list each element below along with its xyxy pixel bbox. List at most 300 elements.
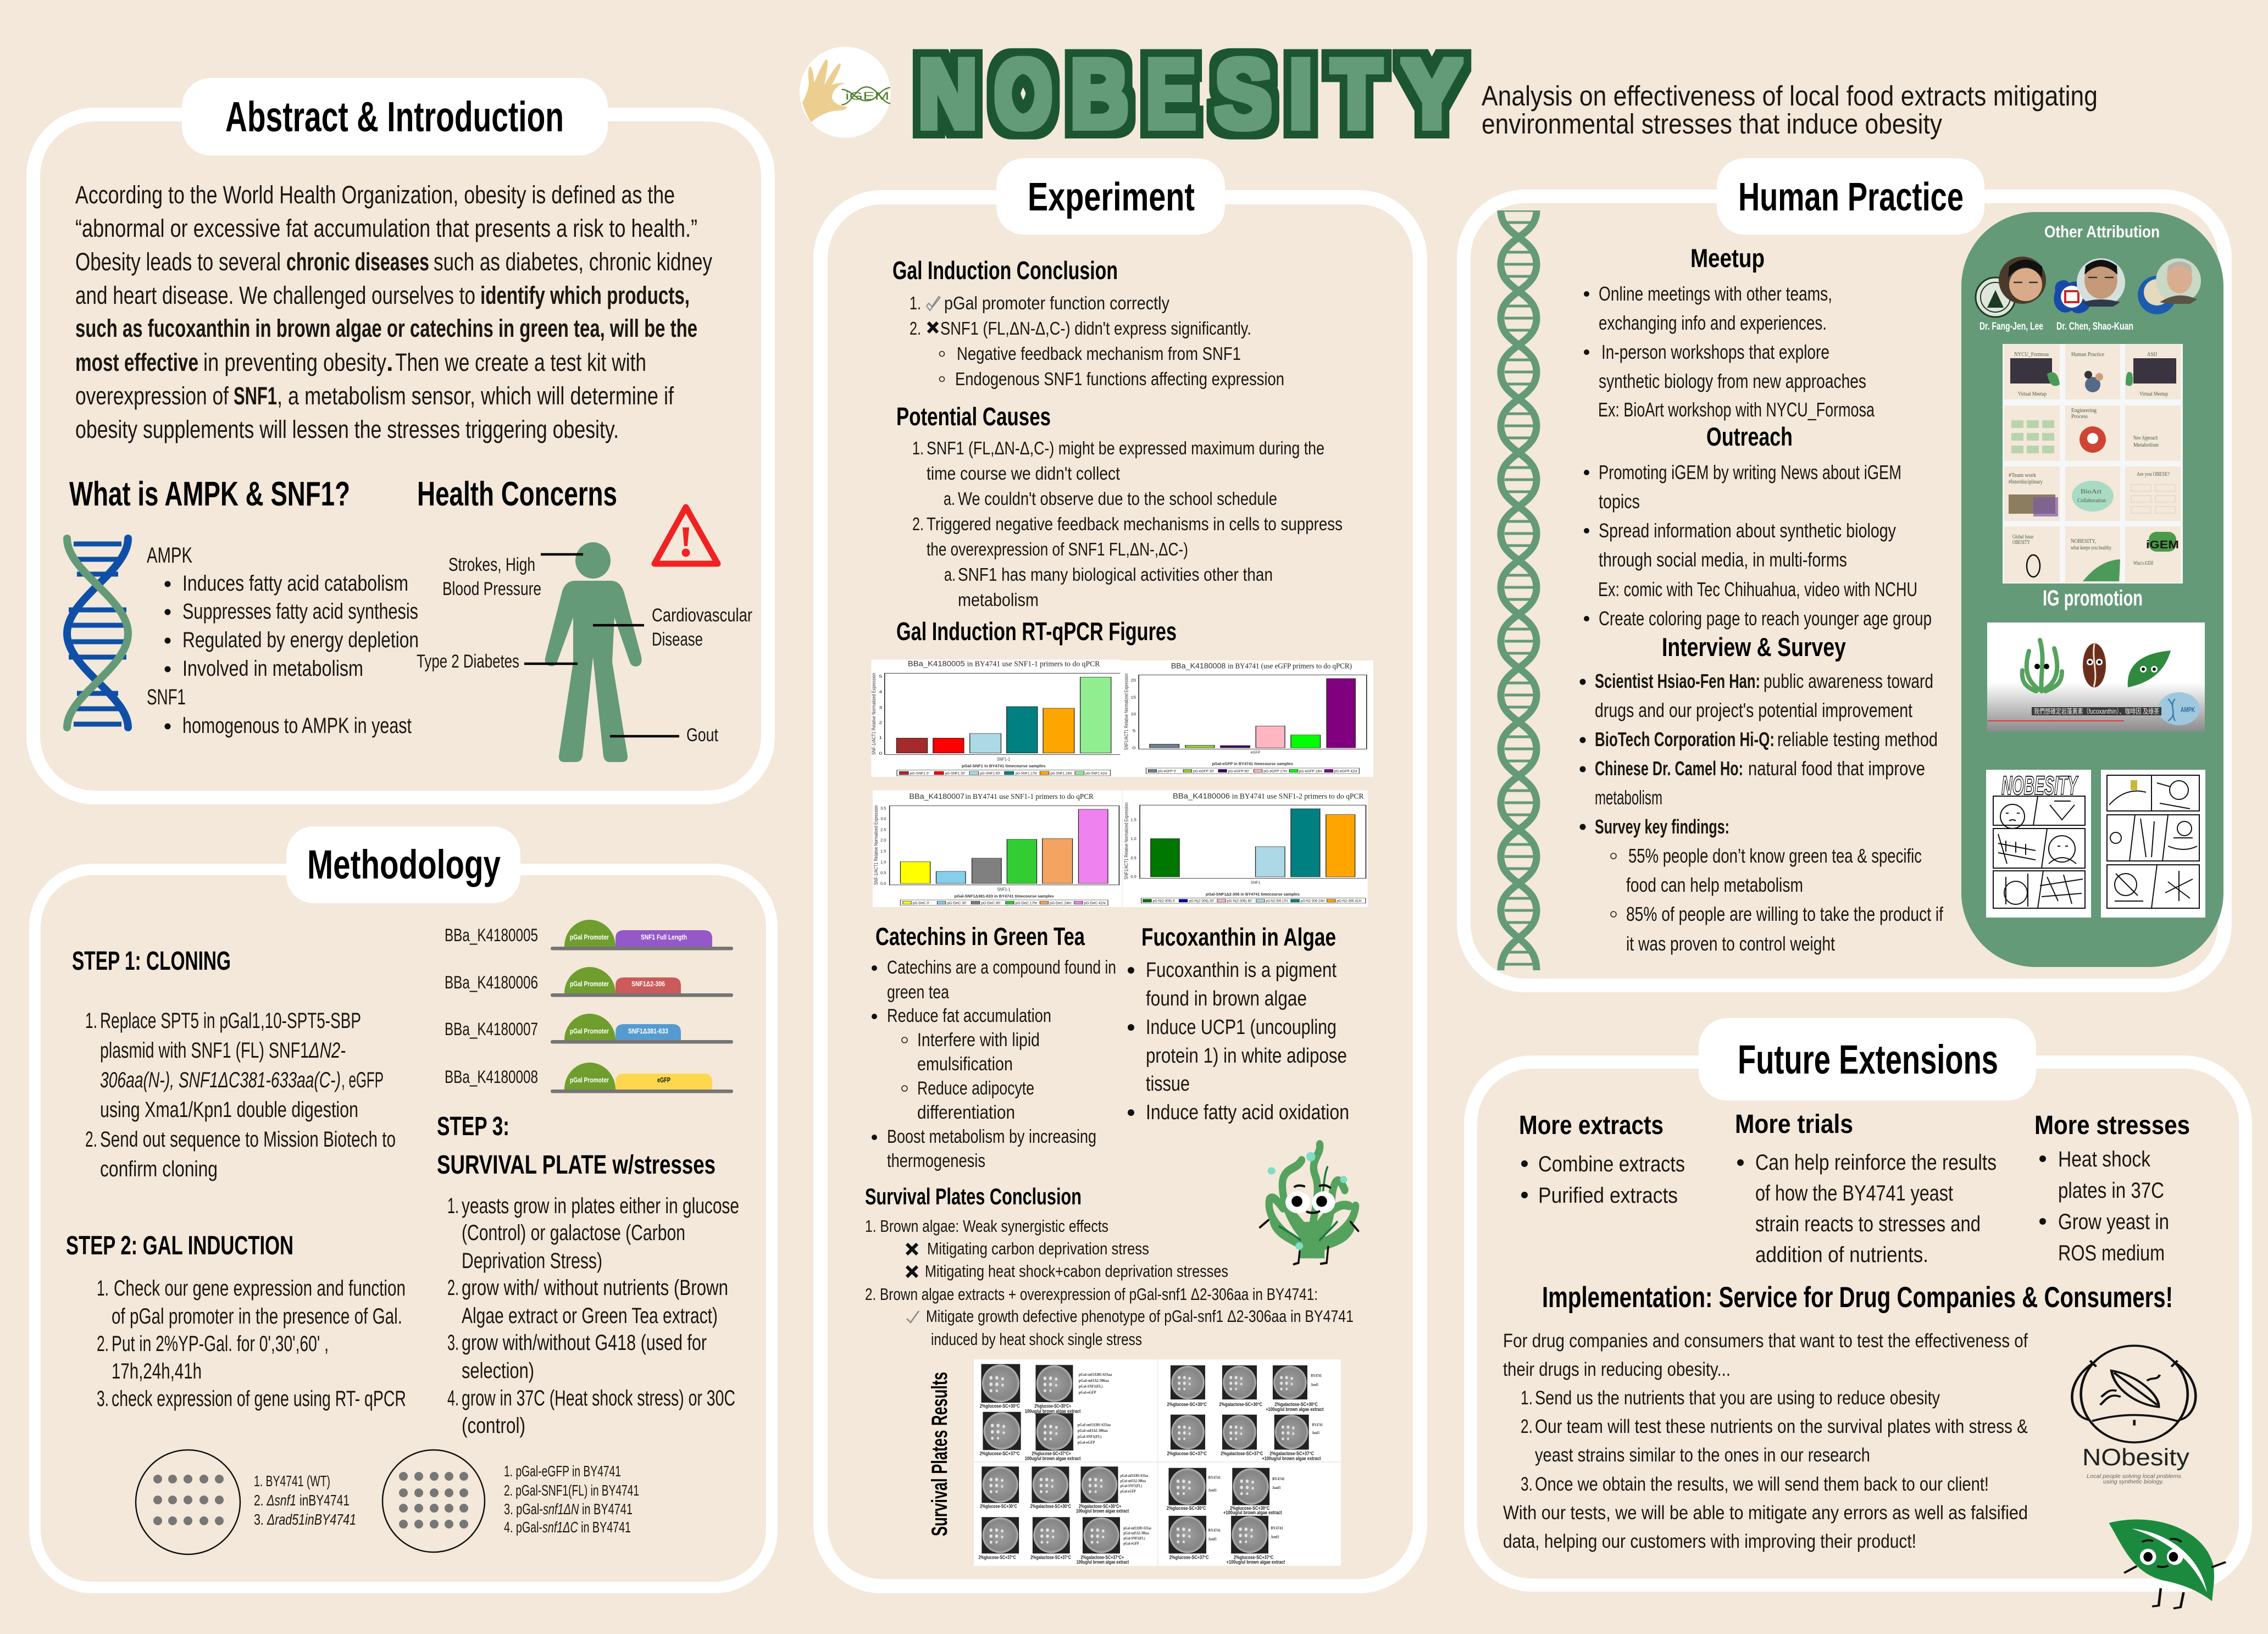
step 1: cloning: Send out sequence to Mission Biotech to bbox=[100, 1127, 396, 1152]
text block: implementation steps: data, helping our customers with improving their product! bbox=[1503, 1531, 1916, 1552]
text block: Catechins in Green Tea: green tea bbox=[887, 982, 949, 1003]
text block: Meetup bbox=[1584, 243, 1875, 421]
figure: IG promotion post grid: Engineering bbox=[2071, 408, 2097, 414]
text block: Potential Causes: the overexpression of SNF1 FL,ΔN-,ΔC-) bbox=[927, 539, 1188, 559]
text block: abstract body bbox=[75, 181, 712, 443]
text block: Survival Plates Conclusion bbox=[865, 1183, 1354, 1349]
heading: Gal Induction RT-qPCR Figures: Gal Induction RT-qPCR Figures bbox=[896, 617, 1177, 646]
figure: survival plate photographs: Δsnf1 bbox=[1271, 1535, 1279, 1539]
text block: abstract body: According to the World Health Organization, obesity is defined as the bbox=[75, 181, 675, 209]
text block: Fucoxanthin in Algae: Fucoxanthin is a pigment bbox=[1146, 959, 1337, 982]
text block: Potential Causes: SNF1 has many biological activities other than bbox=[958, 564, 1273, 585]
step 2: Gal induction: STEP 2: GAL INDUCTION bbox=[66, 1231, 293, 1260]
chart: BBa_K4180008: 5 bbox=[1133, 729, 1135, 733]
text block: Outreach bbox=[1584, 422, 1932, 630]
step 3: survival plate with stresses: SURVIVAL PLATE w/stresses bbox=[437, 1151, 716, 1180]
column: More trials: addition of nutrients. bbox=[1755, 1243, 1928, 1267]
text block: abstract body: , a metabolism sensor, which will determine if bbox=[277, 382, 674, 410]
figure: survival plate photographs: Δsnf1 bbox=[1311, 1383, 1319, 1387]
text block: Outreach: Create coloring page to reach younger age group bbox=[1599, 607, 1932, 630]
column: More stresses: Grow yeast in bbox=[2058, 1210, 2169, 1234]
figure: survival plate photographs: 2%glucose-SC+37°C bbox=[980, 1450, 1020, 1457]
text block: Fucoxanthin in Algae: Induce UCP1 (uncoupling bbox=[1146, 1016, 1337, 1039]
figure: IG promotion post grid: BioArt bbox=[2081, 487, 2102, 495]
chart: BBa_K4180006: pG-N2-306 41H bbox=[1337, 899, 1361, 903]
text block: implementation steps: Once we obtain the results, we will send them back to our client! bbox=[1535, 1474, 1989, 1495]
chart: BBa_K4180006: pG-N2-306 17H bbox=[1266, 899, 1288, 903]
text block: Potential Causes: Potential Causes bbox=[896, 402, 1051, 431]
figure: survival plate photographs: 100ug/ul brown algae extract bbox=[1025, 1408, 1081, 1414]
figure: survival plate photographs: 2%galactose-SC+37°C+ bbox=[1080, 1554, 1124, 1560]
figure: survival plate photographs: +100ug/ul brown algae extract bbox=[1262, 1455, 1321, 1461]
text block: implementation steps: With our tests, we will be able to mitigate any errors as well as falsified bbox=[1503, 1502, 2028, 1524]
text block: Meetup: In-person workshops that explore bbox=[1601, 341, 1829, 363]
chart: BBa_K4180006: 0.0 bbox=[1130, 875, 1136, 879]
chart: BBa_K4180008: pG-eGFP 24H bbox=[1299, 769, 1322, 773]
figure: survival plate photographs: 2%galactose-SC+37°C bbox=[1269, 1450, 1314, 1457]
text block: Survival Plates Conclusion: 1. Brown algae: Weak synergistic effects bbox=[865, 1216, 1108, 1236]
chart: BBa_K4180005: pG-SNF1 30' bbox=[945, 771, 966, 775]
figure: survival plate photographs: Δsnf1 bbox=[1208, 1537, 1217, 1542]
step 1: cloning: ΔN2- bbox=[308, 1038, 346, 1063]
chart: BBa_K4180008: 15 bbox=[1130, 695, 1136, 699]
text block: AMPK and SNF1 list: Induces fatty acid catabolism bbox=[182, 571, 408, 596]
people: attribution portraits and logos: Dr. Chen, Shao-Kuan bbox=[2056, 321, 2133, 332]
figure: IG promotion post grid: #Interdisciplinary bbox=[2009, 479, 2043, 485]
text block: Potential Causes: Triggered negative feedback mechanisms in cells to suppress bbox=[927, 514, 1343, 534]
text block: Catechins in Green Tea: Reduce fat accumulation bbox=[887, 1005, 1051, 1026]
figure: IG promotion post grid: NOBESITY, bbox=[2071, 538, 2096, 544]
text block: Catechins in Green Tea: differentiation bbox=[917, 1102, 1015, 1123]
figure: survival plate photographs: pGal-eGFP bbox=[1121, 1490, 1136, 1494]
chart: BBa_K4180007: 0.5 bbox=[880, 871, 886, 875]
text block: Survival Plates Conclusion: Mitigating carbon deprivation stress bbox=[927, 1239, 1149, 1258]
text block: Survival Plates Conclusion: Mitigate growth defective phenotype of pGal-snf1 Δ2-306aa in BY4741 bbox=[926, 1307, 1354, 1326]
chart: BBa_K4180007: pG-DeC 30' bbox=[947, 901, 967, 905]
column: More extracts: Purified extracts bbox=[1538, 1183, 1678, 1208]
figure: survival plate photographs: pGal-SNF1(FL) bbox=[1123, 1536, 1145, 1541]
text block: Interview & Survey: BioTech Corporation Hi-Q: bbox=[1595, 728, 1775, 751]
figure: survival plate photographs: pGal-SNF1(FL) bbox=[1079, 1385, 1102, 1389]
icon: human figure with labels: Type 2 Diabetes bbox=[417, 651, 519, 672]
figure: survival plate photographs: 2%galactose-SC+37°C bbox=[1221, 1450, 1263, 1457]
chart: BBa_K4180005: SNF1-1 bbox=[997, 757, 1010, 762]
heading tab: Future Extensions bbox=[1699, 1018, 2036, 1101]
step 2: Gal induction: 1. bbox=[97, 1276, 109, 1300]
title: NOBESITY bbox=[918, 39, 1462, 148]
chart: BBa_K4180005: pG-SNF1 17hr bbox=[1016, 771, 1037, 775]
figure: IG promotion post grid: iGEM bbox=[2146, 539, 2179, 551]
text block: Meetup: synthetic biology from new approaches bbox=[1599, 370, 1866, 392]
text block: Meetup: Online meetings with other teams, bbox=[1599, 282, 1832, 305]
column: More trials: Can help reinforce the results bbox=[1755, 1151, 1997, 1175]
diagram: BBa part constructs: SNF1 Full Length bbox=[641, 933, 687, 941]
figure: survival plate photographs: 2%glucose-SC+30°C bbox=[980, 1403, 1020, 1409]
diagram: BBa part constructs: pGal Promoter bbox=[570, 1076, 609, 1084]
chart: BBa_K4180008: 0 bbox=[1133, 746, 1135, 750]
icon: DNA helix blue and green bbox=[67, 538, 128, 727]
step 2: Gal induction: Check our gene expression and function bbox=[114, 1276, 406, 1300]
chart: BBa_K4180007: SNF1-1 bbox=[997, 887, 1011, 892]
text block: Fucoxanthin in Algae: found in brown algae bbox=[1146, 987, 1307, 1010]
figure: IG promotion post grid: OBESITY bbox=[2012, 540, 2030, 546]
text block: abstract body: such as diabetes, chronic kidney bbox=[434, 248, 712, 276]
chart: BBa_K4180007: 2.5 bbox=[880, 827, 886, 832]
text block: Potential Causes bbox=[896, 402, 1343, 610]
text block: Interview & Survey: public awareness toward bbox=[1764, 670, 1933, 692]
text block: Catechins in Green Tea: Reduce adipocyte bbox=[917, 1078, 1034, 1099]
chart: BBa_K4180006: SNF1 bbox=[1251, 880, 1260, 885]
logo: NObesity bbox=[2072, 1346, 2195, 1485]
chart: BBa_K4180005: 1 bbox=[879, 736, 882, 740]
step 1: cloning: STEP 1: CLONING bbox=[72, 947, 231, 976]
text block: AMPK and SNF1 list bbox=[147, 543, 419, 738]
figure: IG promotion post grid: Virtual Meetup bbox=[2018, 391, 2047, 397]
figure: video still with mascots: 我們想確定岩藻黃素（fucoxanthin）、咖啡因 及綠茶 bbox=[2034, 707, 2159, 715]
column: More extracts: Combine extracts bbox=[1538, 1152, 1685, 1176]
step 3: survival plate with stresses: 4. bbox=[447, 1386, 459, 1410]
step 3: survival plate with stresses: STEP 3: bbox=[437, 1112, 509, 1141]
chart: BBa_K4180007: SNF-1/ACT1 Relative Normalized Expression bbox=[873, 805, 879, 885]
figure: survival plate photographs: 2%glucose-SC+30°C bbox=[1230, 1505, 1269, 1511]
chart: BBa_K4180008: pGal-eGFP in BY4741 timecourse samples bbox=[1212, 762, 1293, 766]
figure: survival plate photographs: pGal-snf1Δ381-633aa bbox=[1079, 1373, 1112, 1377]
figure: survival plate photographs: pGal-snf1Δ381-633aa bbox=[1123, 1526, 1151, 1531]
column: More stresses bbox=[2034, 1111, 2190, 1265]
step 1: cloning: plasmid with SNF1 (FL) SNF1 bbox=[100, 1038, 309, 1063]
chart: BBa_K4180008: eGFP bbox=[1251, 751, 1260, 755]
step 1: cloning: 306aa(N-), SNF1ΔC381-633aa(C-) bbox=[100, 1068, 341, 1092]
text block: implementation steps: Our team will test these nutrients on the survival plates with stress & bbox=[1535, 1416, 2028, 1437]
text block: abstract body: identify which products, bbox=[480, 281, 690, 309]
diagram: BBa part constructs: BBa_K4180005 bbox=[445, 925, 538, 945]
figure: survival plate photographs: +100ug/ul brown algae extract bbox=[1266, 1406, 1324, 1412]
step 2: Gal induction bbox=[66, 1231, 406, 1411]
text block: implementation steps bbox=[1503, 1330, 2028, 1552]
diagram: BBa part constructs: pGal Promoter bbox=[570, 1027, 609, 1035]
column: More stresses: plates in 37C bbox=[2058, 1179, 2164, 1203]
figure: comic coloring pages: NOBESITY bbox=[2001, 771, 2078, 801]
chart: BBa_K4180008: BBa_K4180008 bbox=[1171, 662, 1226, 670]
chart: BBa_K4180007: 0.0 bbox=[880, 882, 886, 886]
sidebar: other attribution, IG promotion and comics bbox=[1961, 212, 2223, 967]
heading tab: Methodology: Methodology bbox=[307, 842, 501, 887]
text block: Fucoxanthin in Algae: Induce fatty acid oxidation bbox=[1146, 1101, 1349, 1124]
text block: Survival Plates Conclusion: Mitigating heat shock+cabon deprivation stresses bbox=[925, 1261, 1228, 1281]
text block: Potential Causes: 1. bbox=[912, 438, 924, 458]
logo: NObesity: using synthetic biology. bbox=[2103, 1479, 2164, 1485]
text block: Potential Causes: 2. bbox=[912, 514, 924, 534]
diagram: petri dish with 3 rows: 3. Δrad51inBY4741 bbox=[254, 1511, 356, 1528]
diagram: BBa part constructs: SNF1Δ2-306 bbox=[631, 980, 665, 988]
chart: BBa_K4180008: in BY4741 (use eGFP primers to do qPCR) bbox=[1228, 662, 1352, 670]
figure: survival plate photographs: pGal-eGFP bbox=[1078, 1441, 1095, 1445]
step 1: cloning: 2. bbox=[85, 1127, 97, 1152]
chart: BBa_K4180007: 1.0 bbox=[880, 860, 886, 864]
chart: BBa_K4180005: 2 bbox=[879, 721, 882, 725]
chart: BBa_K4180005 bbox=[870, 659, 1121, 777]
chart: BBa_K4180005: pG-SNF1 24hr bbox=[1050, 771, 1072, 775]
icon: human figure with labels: Disease bbox=[652, 629, 703, 650]
text block: Survival Plates Conclusion: induced by heat shock single stress bbox=[931, 1330, 1142, 1349]
text block: Catechins in Green Tea: thermogenesis bbox=[887, 1151, 985, 1171]
column: More extracts bbox=[1519, 1111, 1685, 1208]
diagram: BBa part constructs bbox=[445, 920, 733, 1093]
figure: survival plate photographs: 2%galactose-SC+37°C bbox=[1030, 1554, 1071, 1560]
chart: BBa_K4180007: pG-DeC 17hr bbox=[1016, 901, 1037, 905]
text block: implementation steps: Send us the nutrients that you are using to reduce obesity bbox=[1535, 1387, 1940, 1409]
icon: warning triangle bbox=[655, 507, 718, 564]
figure: video still with mascots: AMPK bbox=[2181, 705, 2195, 714]
text block: Catechins in Green Tea: emulsification bbox=[917, 1054, 1013, 1075]
chart: BBa_K4180008: pG-eGFP 41H bbox=[1334, 769, 1357, 773]
chart: BBa_K4180006: 1.0 bbox=[1130, 837, 1136, 841]
figure: survival plate photographs: 2%glucose-SC+30°C+ bbox=[1034, 1403, 1071, 1409]
title: NOBESITY: T bbox=[1332, 39, 1382, 148]
text block: abstract body: Obesity leads to several bbox=[75, 248, 281, 276]
icon: human figure with labels: Cardiovascular bbox=[652, 605, 752, 626]
chart: BBa_K4180008: 10 bbox=[1130, 712, 1136, 716]
figure: survival plate photographs: 2%glucose-SC+37°C+ bbox=[1032, 1450, 1071, 1457]
chart: BBa_K4180007: pGal-SNF1Δ381-633 in BY4741 timecourse samples bbox=[955, 894, 1054, 898]
text block: Potential Causes: time course we didn't collect bbox=[927, 463, 1120, 483]
people: attribution portraits and logos bbox=[1976, 257, 2201, 332]
figure: survival plate photographs: BY4741 bbox=[1312, 1423, 1323, 1427]
step 1: cloning: confirm cloning bbox=[100, 1157, 218, 1181]
text block: Meetup: exchanging info and experiences. bbox=[1599, 312, 1827, 334]
diagram: BBa part constructs: BBa_K4180008 bbox=[445, 1067, 538, 1087]
chart: BBa_K4180008: pG-eGFP 17H bbox=[1263, 769, 1287, 773]
figure: survival plate photographs: 2%galactose-SC+30°C bbox=[1274, 1401, 1318, 1407]
text block: AMPK and SNF1 list: Suppresses fatty acid synthesis bbox=[182, 599, 418, 624]
step 1: cloning: using Xma1/Kpn1 double digestion bbox=[100, 1098, 358, 1122]
figure: IG promotion post grid: Human Practice bbox=[2071, 352, 2105, 358]
chart: BBa_K4180007 bbox=[873, 790, 1122, 907]
text block: Interview & Survey: natural food that improve bbox=[1748, 757, 1925, 780]
figure: survival plate photographs: +100ug/ul brown algae extract bbox=[1223, 1510, 1282, 1515]
text block: Interview & Survey: Survey key findings: bbox=[1595, 815, 1729, 838]
text block: AMPK and SNF1 list: SNF1 bbox=[147, 685, 186, 709]
text block: implementation steps: their drugs in reducing obesity... bbox=[1503, 1359, 1731, 1380]
chart: BBa_K4180006 bbox=[1123, 790, 1368, 907]
figure: IG promotion post grid: Global Issue bbox=[2012, 534, 2033, 540]
figure: survival plate photographs: 2%galactose-SC+30°C+ bbox=[1079, 1503, 1121, 1509]
column: More trials: of how the BY4741 yeast bbox=[1755, 1181, 1953, 1205]
chart: BBa_K4180006: 1.5 bbox=[1130, 818, 1136, 822]
diagram: petri dish with 4 rows: 3. pGal-snf1ΔN in BY4741 bbox=[504, 1500, 633, 1518]
chart: BBa_K4180006: in BY4741 use SNF1-2 primers to do qPCR bbox=[1232, 792, 1364, 801]
text block: Meetup: Ex: BioArt workshop with NYCU_Formosa bbox=[1598, 398, 1875, 421]
title: NOBESITY: Y bbox=[1402, 39, 1462, 148]
text block: Interview & Survey: metabolism bbox=[1595, 786, 1662, 809]
chart: BBa_K4180005: BBa_K4180005 bbox=[908, 659, 965, 668]
chart: BBa_K4180005: pG-SNF1 60' bbox=[980, 771, 1000, 775]
figure: survival plate photographs: 2%glucose-SC+30°C bbox=[1167, 1401, 1207, 1407]
figure: IG promotion post grid: Are you OBESE? bbox=[2137, 471, 2170, 477]
text block: Outreach: Promoting iGEM by writing News about iGEM bbox=[1599, 461, 1901, 483]
text block: AMPK and SNF1 list: Regulated by energy depletion bbox=[182, 628, 419, 652]
column: More extracts: More extracts bbox=[1519, 1111, 1663, 1140]
text block: Catechins in Green Tea: Catechins are a compound found in bbox=[887, 957, 1116, 978]
text block: implementation steps: For drug companies and consumers that want to test the effectiveness of bbox=[1503, 1330, 2028, 1352]
diagram: petri dish with 4 rows bbox=[382, 1450, 639, 1552]
text block: AMPK and SNF1 list: AMPK bbox=[147, 543, 192, 568]
figure: IG promotion post grid: NYCU_Formosa bbox=[2014, 352, 2049, 358]
text block: Survival Plates Conclusion: 2. Brown algae extracts + overexpression of pGal-snf1 Δ2-306aa in BY4741: bbox=[865, 1285, 1318, 1304]
text block: abstract body: chronic diseases bbox=[286, 248, 429, 276]
label: Survival Plates Results: Survival Plates Results bbox=[928, 1372, 952, 1536]
figure: survival plate photographs: +100ug/ul brown algae extract bbox=[1227, 1559, 1285, 1565]
figure: survival plate photographs: pGal-snf1Δ381-633aa bbox=[1078, 1423, 1111, 1427]
chart: BBa_K4180007: in BY4741 use SNF1-1 primers to do qPCR bbox=[965, 792, 1094, 801]
heading: IG promotion: IG promotion bbox=[2043, 586, 2143, 610]
text block: implementation steps: yeast strains similar to the ones in our research bbox=[1535, 1444, 1870, 1466]
figure: IG promotion post grid: Collaboration bbox=[2077, 498, 2106, 504]
text block: Interview & Survey: Interview & Survey bbox=[1662, 632, 1846, 662]
chart: BBa_K4180006: pG-N(2-306) 30' bbox=[1189, 899, 1214, 903]
text block: Gal Induction Conclusion: Gal Induction Conclusion bbox=[892, 256, 1118, 285]
text block: abstract body: “abnormal or excessive fat accumulation that presents a risk to health.” bbox=[75, 214, 697, 242]
chart: BBa_K4180005: 4 bbox=[879, 690, 882, 694]
heading tab: Human Practice: Human Practice bbox=[1738, 175, 1964, 219]
figure: IG promotion post grid: Process bbox=[2071, 414, 2088, 420]
icon: human figure with labels: Blood Pressure bbox=[442, 579, 541, 599]
text block: Gal Induction Conclusion: Endogenous SNF1 functions affecting expression bbox=[955, 369, 1284, 389]
step 3: survival plate with stresses: selection) bbox=[462, 1359, 534, 1383]
heading tab: Abstract & Introduction: Abstract & Introduction bbox=[225, 93, 564, 141]
figure: survival plate photographs: 100ug/ul brown algae extract bbox=[1025, 1455, 1081, 1461]
chart: BBa_K4180007: BBa_K4180007 bbox=[909, 792, 964, 801]
figure: IG promotion post grid: what keeps you healthy bbox=[2071, 545, 2111, 551]
step 3: survival plate with stresses bbox=[437, 1112, 739, 1438]
text block: Potential Causes: a. bbox=[944, 488, 955, 509]
step 3: survival plate with stresses: grow with/ without nutrients (Brown bbox=[462, 1276, 728, 1300]
chart: BBa_K4180007: pG-DeC 0' bbox=[913, 901, 930, 905]
text block: Interview & Survey: Scientist Hsiao-Fen Han: bbox=[1595, 670, 1760, 692]
chart: BBa_K4180008: SNF1/ACT1 Relative Normalized Expression bbox=[1123, 673, 1129, 750]
chart: BBa_K4180005: in BY4741 use SNF1-1 primers to do qPCR bbox=[967, 659, 1100, 668]
diagram: BBa part constructs: SNF1Δ381-633 bbox=[628, 1027, 668, 1035]
column: More trials: More trials bbox=[1735, 1110, 1853, 1139]
column: More trials: strain reacts to stresses and bbox=[1755, 1212, 1981, 1236]
chart: BBa_K4180005: pGal-SNF1 in BY4741 timecourse samples bbox=[962, 764, 1045, 769]
text block: Potential Causes: metabolism bbox=[958, 590, 1039, 610]
chart: BBa_K4180007: pG-DeC 60' bbox=[981, 901, 1001, 905]
figure: survival plate photographs: 100ug/ul brown algae extract bbox=[1077, 1559, 1129, 1565]
figure: video still with mascots bbox=[1987, 623, 2205, 731]
text block: implementation steps: 1. bbox=[1521, 1387, 1533, 1409]
text block: abstract body: Then we create a test kit with bbox=[395, 348, 646, 376]
heading tab: Methodology bbox=[286, 826, 520, 903]
step 3: survival plate with stresses: yeasts grow in plates either in glucose bbox=[462, 1194, 739, 1218]
figure: IG promotion post grid: New Approach bbox=[2133, 435, 2158, 441]
people: attribution portraits and logos: Dr. Fang-Jen, Lee bbox=[1979, 321, 2043, 332]
diagram: BBa part constructs: BBa_K4180007 bbox=[445, 1019, 538, 1039]
figure: IG promotion post grid: ASIJ bbox=[2147, 352, 2157, 358]
step 3: survival plate with stresses: Deprivation Stress) bbox=[462, 1249, 602, 1273]
panel: Experiment bbox=[820, 158, 1420, 1586]
icon: leaf mascot bbox=[2109, 1519, 2226, 1608]
diagram: petri dish with 3 rows bbox=[136, 1450, 356, 1554]
figure: IG promotion post grid: Metabolism bbox=[2133, 442, 2159, 448]
icon: human figure with labels: Strokes, High bbox=[448, 554, 535, 575]
chart: BBa_K4180007: pG-DeC 24hr bbox=[1050, 901, 1072, 905]
title: NOBESITY: B bbox=[1071, 39, 1128, 148]
chart: BBa_K4180007: 3.0 bbox=[880, 817, 886, 821]
diagram: BBa part constructs: BBa_K4180006 bbox=[445, 972, 538, 992]
figure: survival plate photographs: pGal-eGFP bbox=[1079, 1391, 1096, 1395]
figure: survival plate photographs: pGal-snf1Δ2-306aa bbox=[1121, 1479, 1146, 1483]
text block: abstract body: most effective bbox=[75, 348, 198, 376]
chart: BBa_K4180005: 5 bbox=[879, 675, 882, 679]
text block: Fucoxanthin in Algae bbox=[1128, 923, 1349, 1124]
logo: NObesity: Local people solving local problems bbox=[2087, 1474, 2181, 1480]
figure: survival plate photographs bbox=[974, 1359, 1341, 1566]
figure: survival plate photographs: pGal-snf1Δ2-306aa bbox=[1078, 1429, 1108, 1433]
figure: survival plate photographs: BY4741 bbox=[1311, 1374, 1322, 1378]
logo: iGEM hand and DNA: iGEM bbox=[845, 90, 889, 103]
text block: abstract body: and heart disease. We challenged ourselves to bbox=[75, 281, 475, 309]
figure: survival plate photographs: 2%glucose-SC+37°C bbox=[979, 1554, 1016, 1560]
figure: IG promotion post grid: Virtual Meetup bbox=[2139, 391, 2168, 397]
text block: Catechins in Green Tea: Interfere with lipid bbox=[917, 1030, 1040, 1051]
chart: BBa_K4180006: pG-N(2-306) 60' bbox=[1227, 899, 1252, 903]
chart: BBa_K4180005: pG-SNF1 41hr bbox=[1085, 771, 1107, 775]
figure: survival plate photographs: 2%glucose-SC+30°C bbox=[980, 1503, 1017, 1509]
chart: BBa_K4180008: 20 bbox=[1130, 679, 1136, 683]
figure: survival plate photographs: BY4741 bbox=[1208, 1529, 1221, 1533]
text block: Outreach: Outreach bbox=[1706, 422, 1793, 451]
text block: AMPK and SNF1 list: homogenous to AMPK in yeast bbox=[182, 714, 412, 738]
text block: Meetup: Meetup bbox=[1690, 243, 1765, 273]
text block: Interview & Survey: food can help metabolism bbox=[1626, 874, 1803, 896]
step 2: Gal induction: check expression of gene using RT- qPCR bbox=[112, 1387, 406, 1411]
figure: survival plate photographs: pGal-snf1Δ2-306aa bbox=[1079, 1379, 1109, 1383]
diagram: BBa part constructs: eGFP bbox=[657, 1076, 670, 1084]
title: NOBESITY: N bbox=[918, 39, 977, 148]
step 3: survival plate with stresses: (control) bbox=[462, 1414, 525, 1438]
heading tab: Future Extensions: Future Extensions bbox=[1738, 1037, 1998, 1082]
chart: BBa_K4180005: pG-SNF1 0' bbox=[910, 771, 929, 775]
step 2: Gal induction: 3. bbox=[97, 1387, 109, 1411]
figure: survival plate photographs: pGal-eGFP bbox=[1123, 1542, 1139, 1546]
chart: BBa_K4180006: SNF1/ACT1 Relative Normalized Expression bbox=[1123, 803, 1129, 880]
figure: survival plate photographs: pGal-snf1Δ381-633aa bbox=[1121, 1474, 1149, 1478]
column: More stresses: ROS medium bbox=[2058, 1241, 2165, 1265]
figure: survival plate photographs: pGal-snf1Δ2-306aa bbox=[1123, 1531, 1149, 1536]
text block: Potential Causes: a. bbox=[944, 564, 956, 585]
diagram: petri dish with 4 rows: 1. pGal-eGFP in BY4741 bbox=[504, 1463, 621, 1480]
icon: seaweed mascot bbox=[1260, 1144, 1358, 1264]
step 2: Gal induction: of pGal promoter in the presence of Gal. bbox=[112, 1304, 402, 1329]
text block: Outreach: Spread information about synthetic biology bbox=[1599, 519, 1896, 542]
text block: abstract body: obesity supplements will lessen the stresses triggering obesity. bbox=[75, 415, 619, 443]
figure: survival plate photographs: 2%galactose-SC+30°C bbox=[1219, 1401, 1262, 1407]
text block: implementation steps: 2. bbox=[1521, 1416, 1533, 1437]
figure: survival plate photographs: 2%glucose-SC+37°C bbox=[1234, 1554, 1273, 1560]
column: More trials bbox=[1735, 1110, 1997, 1267]
figure: IG promotion post grid: What is iGEM bbox=[2133, 560, 2153, 566]
text block: Potential Causes: SNF1 (FL,ΔN-Δ,C-) might be expressed maximum during the bbox=[927, 438, 1324, 458]
chart: BBa_K4180008: pG-eGFP 30' bbox=[1193, 769, 1214, 773]
figure: survival plate photographs: Δsnf1 bbox=[1312, 1431, 1320, 1435]
figure: comic coloring pages bbox=[1986, 770, 2205, 918]
text block: Interview & Survey: Chinese Dr. Camel Ho: bbox=[1595, 757, 1743, 780]
chart: BBa_K4180007: 3.5 bbox=[880, 806, 886, 810]
charts: RT-qPCR bar charts bbox=[870, 659, 1373, 907]
text block: abstract body: . bbox=[386, 348, 393, 376]
text block: abstract body: overexpression of bbox=[75, 382, 229, 410]
